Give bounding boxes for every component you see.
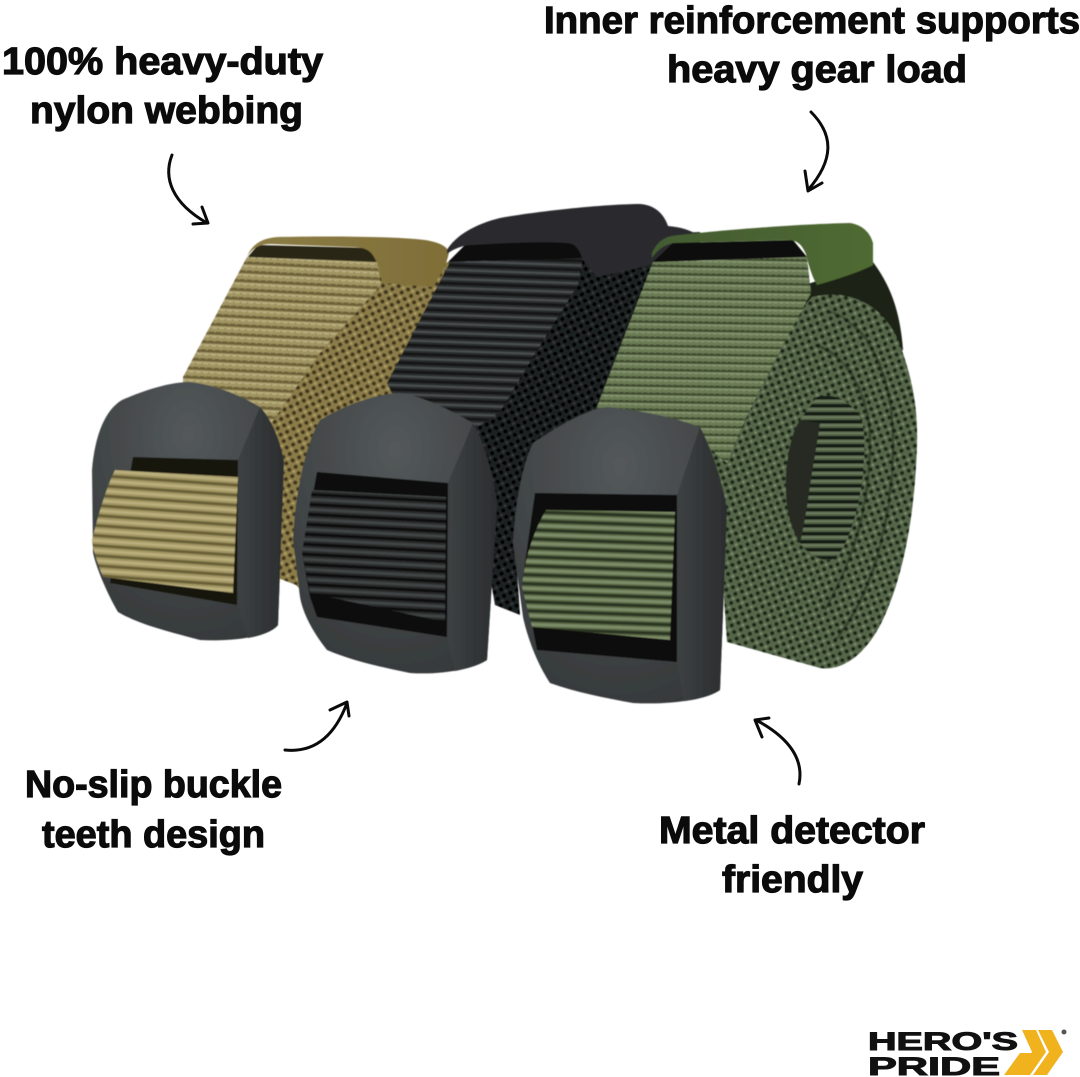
buckle frame xyxy=(513,407,727,703)
buckle webbing xyxy=(92,470,238,593)
buckle right edge xyxy=(447,423,497,671)
black belt xyxy=(387,204,700,615)
logo: Hero's Pride xyxy=(868,1028,1066,1077)
tan loop xyxy=(247,236,449,287)
heading: inner reinforcement: heavy gear load xyxy=(667,49,967,91)
heading: nylon webbing xyxy=(2,41,323,132)
buckle: black xyxy=(293,393,497,673)
buckle frame xyxy=(92,382,284,640)
heading: inner reinforcement: Inner reinforcement supports xyxy=(544,0,1080,42)
green slot shadow xyxy=(653,240,807,262)
green inner band xyxy=(800,396,864,560)
buckle right edge xyxy=(677,427,727,701)
buckle window xyxy=(523,493,677,662)
buckle webbing xyxy=(522,510,675,640)
heading: no-slip buckle xyxy=(25,764,282,856)
logo chevrons xyxy=(1004,1030,1063,1075)
black coil xyxy=(387,232,700,615)
heading: metal detector friendly: Metal detector xyxy=(659,810,925,852)
heading: metal detector friendly: friendly xyxy=(722,859,863,901)
tan coil xyxy=(255,262,470,600)
heading: no-slip buckle: No-slip buckle xyxy=(25,764,282,806)
heading: nylon webbing: 100% heavy-duty xyxy=(2,41,323,83)
logo registered mark xyxy=(1062,1030,1066,1034)
green coil hole xyxy=(786,420,820,543)
green coil layers xyxy=(815,312,893,640)
heading: nylon webbing: nylon webbing xyxy=(30,90,303,132)
heading: no-slip buckle: teeth design xyxy=(42,814,265,856)
tan belt xyxy=(183,236,470,600)
tan strip xyxy=(183,257,381,425)
arrow: webbing callout xyxy=(169,155,208,224)
green coil xyxy=(700,295,917,668)
tan slot shadow xyxy=(247,245,380,265)
buckle: tan xyxy=(92,382,284,640)
buckle right edge xyxy=(238,407,284,638)
buckle webbing xyxy=(302,490,446,622)
heading: metal detector friendly xyxy=(659,810,925,901)
logo wordmark: HERO'S xyxy=(868,1028,1018,1056)
buckle window xyxy=(302,472,448,637)
arrow: reinforcement callout xyxy=(805,112,828,191)
black slot shadow xyxy=(448,236,584,262)
logo wordmark xyxy=(868,1028,1018,1077)
arrow: buckle callout xyxy=(285,702,349,750)
black loop xyxy=(447,204,696,277)
three belts illustration xyxy=(92,204,917,703)
green loop xyxy=(652,223,873,285)
buckle window xyxy=(110,457,238,605)
black strip xyxy=(387,258,583,430)
heading: inner reinforcement xyxy=(544,0,1080,91)
buckle: green xyxy=(513,407,727,703)
green coil back xyxy=(800,262,903,360)
buckle frame xyxy=(293,393,497,673)
arrow: metal detector callout xyxy=(755,718,800,784)
green belt xyxy=(590,223,917,668)
green strip xyxy=(590,257,811,463)
